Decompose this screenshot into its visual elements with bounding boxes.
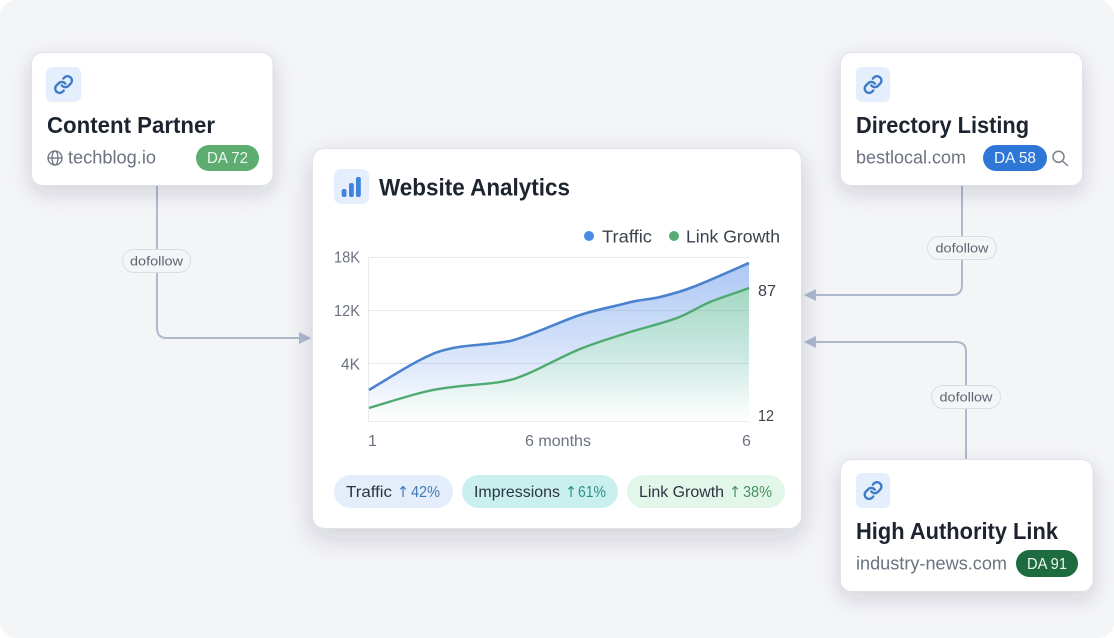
- chart frame: [368, 257, 749, 422]
- badge: DA 72: DA 72: [207, 150, 248, 167]
- x axis labels: 1: [368, 433, 377, 450]
- icon: bar chart: [334, 169, 369, 204]
- legend: [584, 226, 780, 246]
- arrow: high authority link to analytics: [804, 336, 966, 459]
- domain: techblog.io: [68, 148, 156, 168]
- heading: Content Partner: [47, 112, 215, 138]
- legend: Traffic: [602, 226, 652, 246]
- icon: link: [46, 67, 81, 102]
- badge: DA 91: [1016, 550, 1078, 577]
- metric: traffic: 42%: [411, 484, 440, 501]
- panel: content partner: [32, 52, 273, 186]
- panel: directory listing: [840, 52, 1082, 186]
- arrow: directory listing to analytics: [804, 186, 962, 301]
- line: traffic: [369, 263, 749, 390]
- grid lines: [369, 310, 749, 364]
- y axis labels: 4K: [341, 356, 360, 374]
- y axis labels: [334, 250, 360, 374]
- area: traffic: [369, 263, 749, 421]
- panel: website analytics: [312, 148, 802, 528]
- panel: high authority link: [840, 460, 1093, 592]
- icon: link: [856, 473, 890, 508]
- right axis labels: 12: [758, 408, 774, 425]
- domain: bestlocal.com: [856, 148, 966, 168]
- area: link growth: [369, 288, 749, 421]
- arrow: content partner to analytics: [157, 186, 311, 344]
- label: dofollow top right: [928, 236, 996, 260]
- metric: link growth: ↑: [729, 483, 741, 501]
- metric: link growth: 38%: [743, 484, 772, 501]
- icon: globe: [48, 151, 62, 165]
- x axis labels: [368, 433, 751, 450]
- heading: High Authority Link: [856, 518, 1059, 544]
- label: dofollow left: [122, 250, 190, 272]
- badge: DA 58: DA 58: [994, 150, 1036, 167]
- x axis labels: 6 months: [525, 433, 591, 450]
- badge: DA 72: [196, 145, 259, 171]
- label: dofollow left: dofollow: [130, 254, 184, 268]
- metric: impressions: [462, 475, 618, 508]
- icon: link: [856, 67, 890, 102]
- y axis labels: 18K: [334, 250, 360, 266]
- domain: industry-news.com: [856, 554, 1007, 574]
- heading: Website Analytics: [379, 174, 570, 202]
- label: dofollow bottom right: [932, 386, 1000, 408]
- icon: search: [1053, 151, 1068, 166]
- metric: impressions: 61%: [578, 484, 606, 501]
- badge: DA 58: [983, 145, 1047, 171]
- x axis labels: 6: [742, 433, 751, 450]
- chart: traffic and link growth: [334, 250, 776, 450]
- line: link growth: [369, 288, 749, 408]
- metric: traffic: [334, 475, 453, 508]
- label: dofollow bottom right: dofollow: [940, 390, 993, 404]
- metric: link growth: [627, 475, 785, 508]
- right axis labels: 87: [758, 283, 776, 300]
- metric: impressions: Impressions: [474, 484, 560, 501]
- metric: impressions: ↑: [565, 483, 577, 501]
- badge: DA 91: DA 91: [1027, 556, 1067, 573]
- metric: link growth: Link Growth: [639, 484, 724, 501]
- legend: Link Growth: [686, 226, 780, 246]
- heading: Directory Listing: [856, 112, 1029, 138]
- right axis labels: [758, 283, 776, 425]
- label: dofollow top right: dofollow: [936, 240, 989, 256]
- metric: traffic: ↑: [397, 483, 409, 501]
- metric: traffic: Traffic: [346, 484, 392, 501]
- y axis labels: 12K: [334, 303, 360, 320]
